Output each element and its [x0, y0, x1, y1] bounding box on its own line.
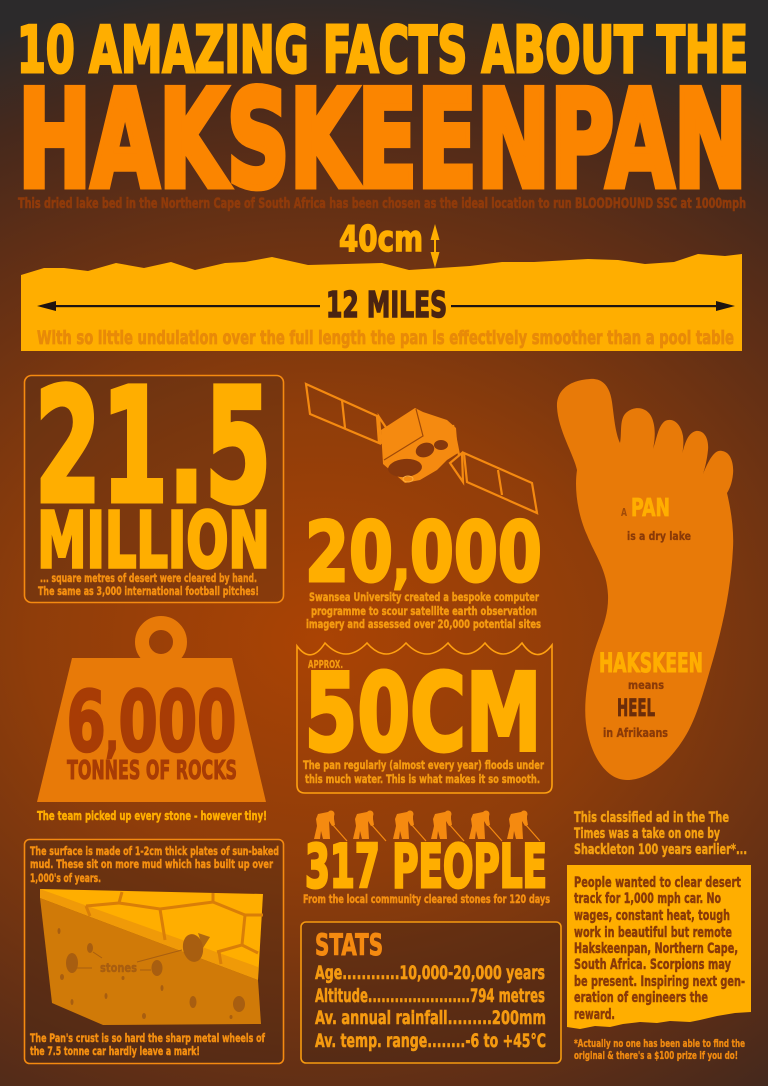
ad text — [574, 875, 745, 1023]
foot text: a pan: is a dry lake — [627, 529, 691, 543]
foot text: a pan: PAN — [631, 493, 670, 522]
caption: this much water. This is what makes it so smooth. — [305, 772, 540, 786]
panel: surface cross-section — [24, 840, 284, 1064]
foot text: hakskeen heel: in Afrikaans — [603, 726, 668, 740]
crust text — [30, 1031, 266, 1058]
panel: 50cm water — [297, 643, 552, 793]
caption — [303, 758, 544, 786]
foot text: a pan — [621, 493, 691, 543]
caption: ... square metres of desert were cleared by hand. — [40, 571, 257, 585]
panel: pan profile: 12 MILES — [326, 283, 447, 326]
panel: 21.5 million — [24, 354, 284, 602]
stats rows: Av. temp. range........-6 to +45°C — [315, 1030, 546, 1052]
panel: foot — [557, 379, 733, 780]
caption: The pan regularly (almost every year) floods under — [303, 758, 544, 772]
text: TONNES OF ROCKS — [67, 756, 237, 786]
fact: 20,000: 20,000 — [305, 505, 542, 601]
arrow: 40cm height — [430, 224, 440, 268]
foot text: hakskeen heel — [599, 648, 703, 740]
surface text — [30, 844, 279, 885]
surface text: The surface is made of 1-2cm thick plates of sun-baked — [30, 844, 279, 858]
caption: satellite search: imagery and assessed over 20,000 potential sites — [306, 617, 541, 631]
stats rows: Altitude.......................794 metres — [315, 985, 545, 1007]
crust text: the 7.5 tonne car hardly leave a mark! — [30, 1044, 200, 1058]
stats rows: Av. annual rainfall.........200mm — [315, 1007, 546, 1029]
arrow: 12 miles right — [451, 301, 735, 311]
icon: satellite — [306, 384, 537, 513]
caption: satellite search: programme to scour satellite earth observation — [311, 604, 537, 618]
caption: local community: From the local community cleared stones for 120 days — [303, 892, 550, 906]
caption: satellite search — [306, 590, 541, 631]
panel: pan profile — [21, 254, 742, 351]
footnote — [574, 1037, 745, 1062]
icon: workers — [314, 810, 540, 841]
text: MILLION — [37, 496, 270, 586]
surface text: mud. These sit on more mud which has built up over — [30, 857, 273, 871]
panel: stats: STATS — [315, 929, 383, 962]
stats rows: Age............10,000-20,000 years — [315, 962, 545, 984]
foot text: hakskeen heel: HAKSKEEN — [599, 648, 703, 679]
caption: every stone: The team picked up every stone - however tiny! — [37, 809, 267, 823]
ad text: eration of engineers the — [574, 990, 708, 1006]
foot text: hakskeen heel: means — [628, 678, 664, 692]
arrow: 12 miles left — [37, 301, 320, 311]
ad text: reward. — [574, 1007, 615, 1023]
stats rows — [315, 962, 546, 1052]
icon: weight with 6,000 tonnes: 6,000 — [66, 673, 236, 771]
caption — [38, 571, 259, 598]
panel: stats — [301, 922, 561, 1063]
illustration: mud layers — [40, 889, 263, 1025]
stones label: stones — [100, 960, 137, 975]
panel: classified ad — [567, 865, 751, 1029]
foot text: a pan: A — [621, 506, 627, 519]
text: 21.5 — [34, 354, 271, 538]
surface text: 1,000's of years. — [30, 871, 101, 885]
approx label: APPROX. — [308, 658, 343, 671]
icon: weight with 6,000 tonnes — [37, 623, 266, 802]
caption: The same as 3,000 international football pitches! — [38, 584, 259, 598]
40cm label: 40cm — [339, 217, 423, 260]
foot text: hakskeen heel: HEEL — [617, 694, 655, 722]
caption: satellite search: Swansea University created a bespoke computer — [309, 590, 539, 604]
classified ad intro — [574, 810, 747, 858]
crust text: The Pan's crust is so hard the sharp metal wheels of — [30, 1031, 266, 1045]
